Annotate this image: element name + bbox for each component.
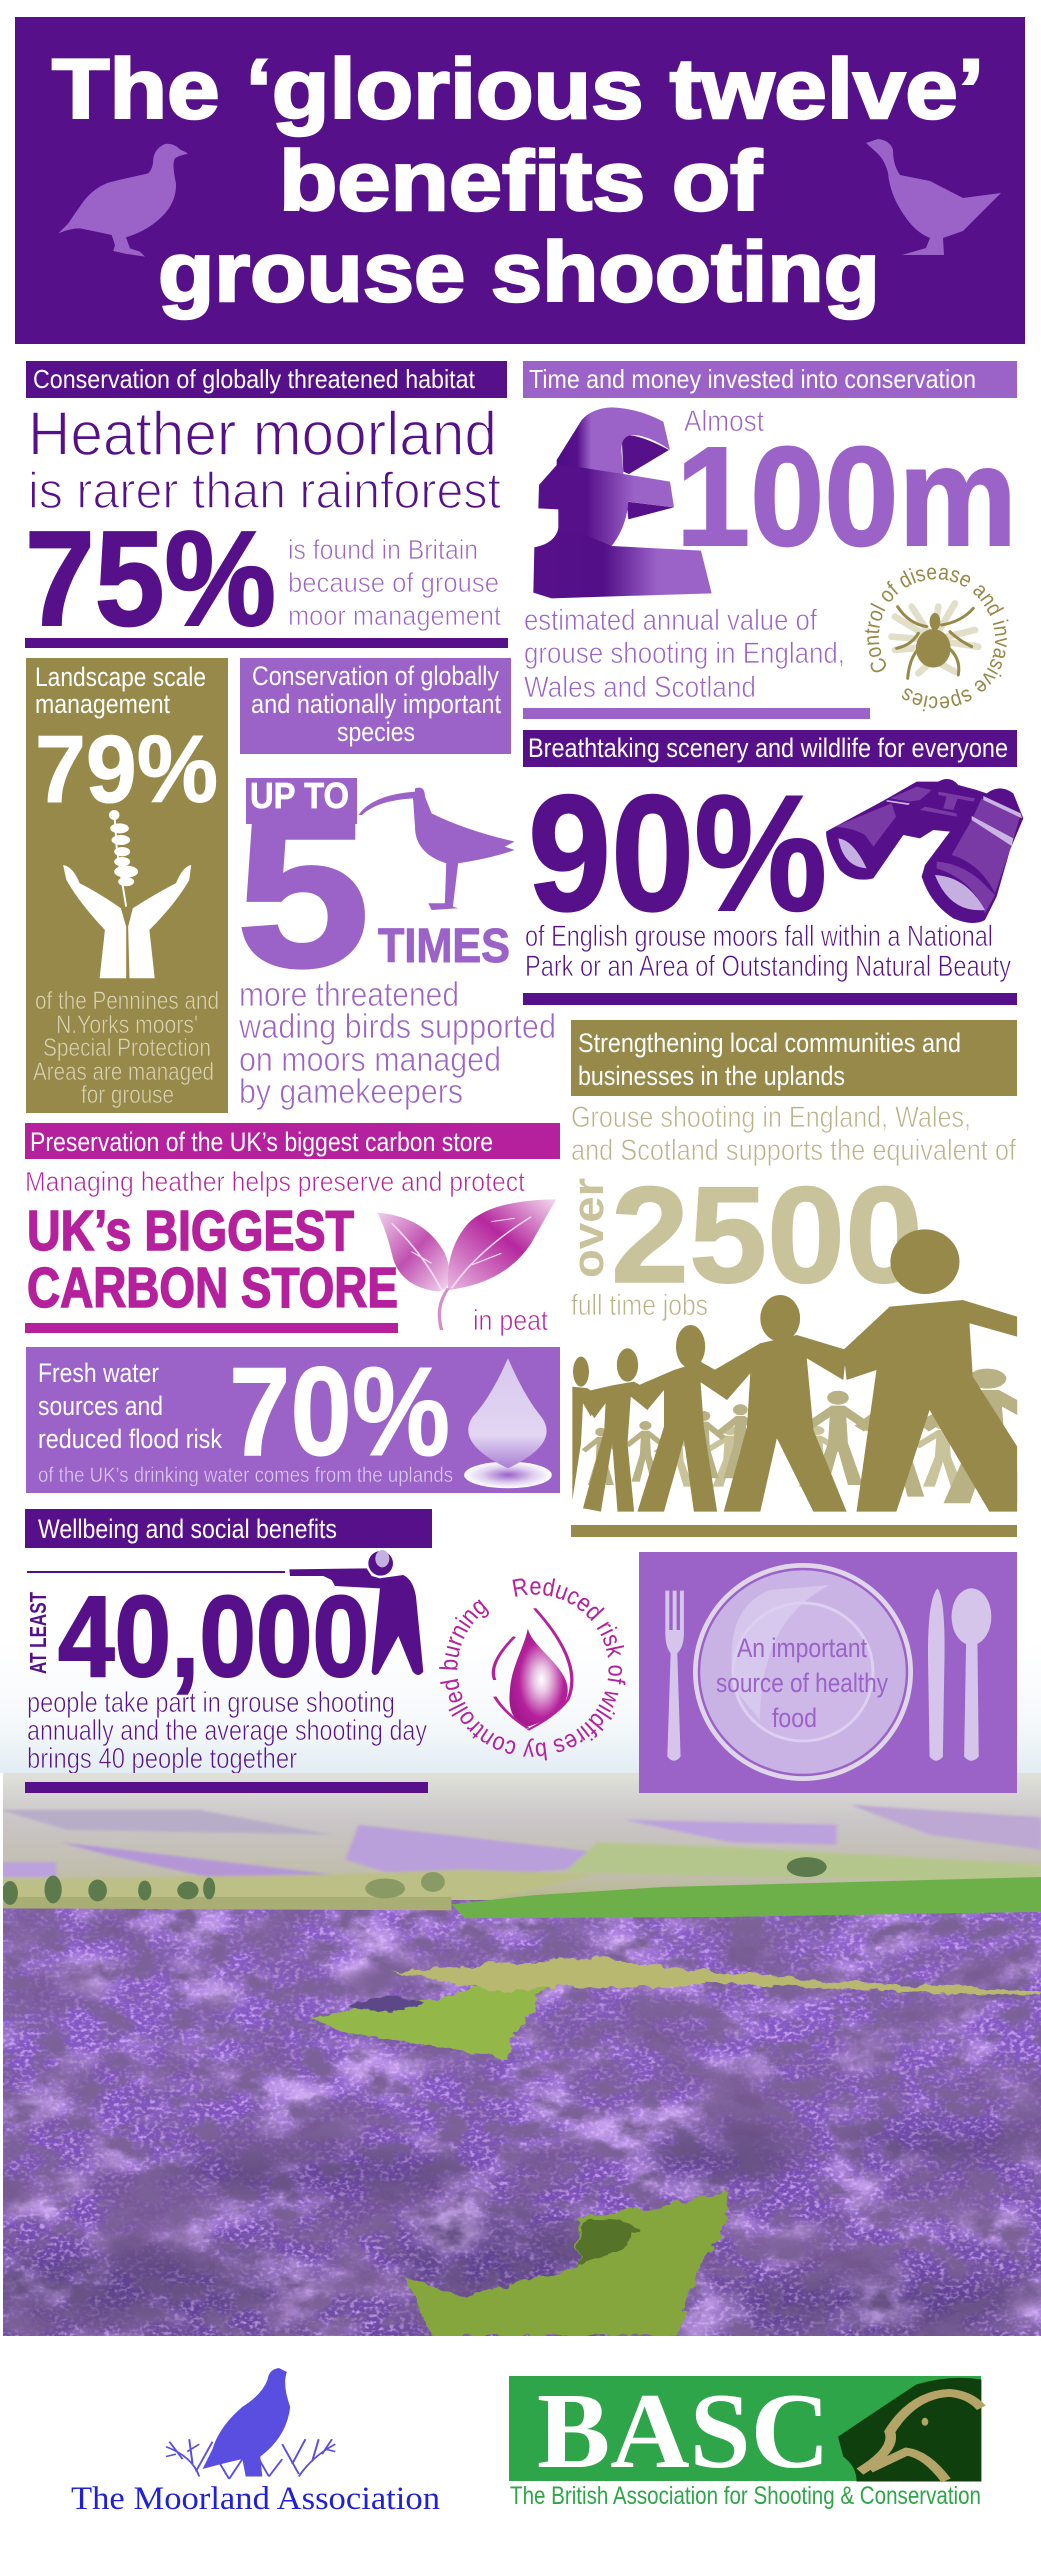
text: pennines: of the Pennines and <box>35 987 219 1015</box>
text: english grouse moors <box>525 920 1011 983</box>
icon: water drop <box>464 1358 552 1488</box>
text: heather moorland: Heather moorland <box>28 400 497 469</box>
stat: 70%: 70% <box>229 1341 450 1482</box>
icon: curlew <box>359 788 515 910</box>
heading: species: species <box>337 717 415 747</box>
icon: cutlery <box>665 1588 991 1761</box>
badge: wildfires: Reduced risk of wildfires by controlled burning <box>439 1578 626 1760</box>
heading: landscape <box>35 662 206 719</box>
text: wading birds: more threatened <box>239 976 459 1014</box>
title banner <box>15 17 1025 344</box>
background sky gradient <box>0 1640 1041 1775</box>
icon: plate <box>693 1563 913 1781</box>
stat: 40,000: 40,000 <box>58 1573 369 1701</box>
text: healthy food: source of healthy <box>716 1668 888 1698</box>
icon: hands and heather <box>63 810 191 978</box>
text: wading birds: on moors managed <box>239 1041 501 1079</box>
label: at least: AT LEAST <box>25 1592 51 1674</box>
icon: pound sign <box>533 407 712 598</box>
photo: heather moorland <box>0 1773 1041 2560</box>
heading: communities: businesses in the uplands <box>578 1061 845 1091</box>
text: estimated annual value: estimated annual value of <box>524 604 818 637</box>
text: estimated annual value <box>524 604 845 704</box>
text: full time jobs: full time jobs <box>571 1289 708 1322</box>
text: people take part: annually and the average shooting day <box>27 1715 427 1747</box>
icon: tick <box>892 603 978 678</box>
panel: habitat <box>25 361 508 654</box>
stat: 79%: 79% <box>35 716 218 823</box>
stat: 2500: 2500 <box>611 1159 923 1312</box>
text: people take part: people take part in grouse shooting <box>27 1687 395 1719</box>
logo: moorland association <box>71 2368 440 2517</box>
icon: grouse and heather <box>166 2368 335 2479</box>
heading: communities: Strengthening local communities and <box>578 1028 961 1058</box>
text: BASC: BASC <box>537 2372 830 2491</box>
text: found in Britain: because of grouse <box>288 567 499 598</box>
heading: fresh water: Fresh water <box>38 1358 159 1388</box>
text: wading birds <box>238 976 556 1111</box>
text: healthy food: An important <box>737 1633 867 1663</box>
heading: species <box>240 658 511 754</box>
text: estimated annual value: grouse shooting in England, <box>524 637 845 670</box>
text: heather moorland <box>28 400 501 519</box>
text: in peat: in peat <box>473 1305 548 1337</box>
panel: scenery <box>523 730 1023 1005</box>
text: found in Britain: moor management <box>288 600 501 631</box>
icon: flame <box>493 1608 572 1730</box>
text: pennines: Areas are managed <box>33 1058 214 1086</box>
icon: leaves <box>377 1199 556 1330</box>
text: found in Britain: is found in Britain <box>288 534 478 565</box>
stat: biggest carbon store: UK’s BIGGEST <box>27 1199 354 1263</box>
text: healthy food <box>716 1633 888 1733</box>
label: over: over <box>564 1178 613 1278</box>
heading: fresh water: sources and <box>38 1391 163 1421</box>
heading: wellbeing <box>25 1509 432 1548</box>
stat: 5: 5 <box>236 770 370 1013</box>
logo: BASC <box>509 2372 981 2510</box>
icon: grouse right <box>866 139 1001 255</box>
label: up to: UP TO <box>250 775 349 816</box>
title text <box>52 42 984 319</box>
icon: binoculars <box>826 779 1023 923</box>
heather field <box>3 1900 1041 2336</box>
panel: wellbeing <box>25 1509 432 1775</box>
text: people take part <box>27 1687 427 1775</box>
icon: grouse left <box>58 144 188 257</box>
panel: healthy food <box>639 1552 1017 1793</box>
stat: 75%: 75% <box>25 503 276 654</box>
stat: biggest carbon store: CARBON STORE <box>27 1256 398 1320</box>
label: times: TIMES <box>378 920 510 973</box>
title text: The ‘glorious twelve’ <box>52 42 984 136</box>
heading: carbon: Preservation of the UK’s biggest carbon store <box>30 1127 493 1157</box>
text: wading birds: wading birds supported <box>238 1008 556 1046</box>
text: healthy food: food <box>772 1703 817 1733</box>
heading: species: Conservation of globally <box>252 661 499 691</box>
stat: 100m: 100m <box>676 417 1017 575</box>
text: managing heather: Managing heather helps preserve and protect <box>25 1166 525 1197</box>
bar: wellbeing footer <box>25 1782 428 1793</box>
panel: investment <box>523 361 1017 719</box>
heading: habitat: Conservation of globally threatened habitat <box>33 364 476 394</box>
panel: landscape scale management <box>26 658 228 1113</box>
text: drinking water: of the UK’s drinking water comes from the uplands <box>38 1464 453 1487</box>
shadows and clearings <box>0 1957 1041 2336</box>
heading: fresh water: reduced flood risk <box>38 1424 222 1454</box>
stat: biggest carbon store <box>27 1199 398 1320</box>
text: people take part: brings 40 people together <box>27 1743 297 1775</box>
badge: control of disease: Control of disease and invasive species <box>864 568 1008 712</box>
icon: people chain <box>572 1229 1041 1512</box>
title text: benefits of <box>279 134 763 228</box>
text: pennines <box>33 987 219 1109</box>
panel: fresh water <box>26 1341 560 1493</box>
icon: duck head <box>838 2378 981 2481</box>
text: heather moorland: is rarer than rainforest <box>28 462 501 519</box>
text: almost: Almost <box>684 405 765 438</box>
text: estimated annual value: Wales and Scotland <box>524 671 756 704</box>
heading: landscape: Landscape scale <box>35 662 206 692</box>
text: grouse shooting supports: Grouse shooting in England, Wales, <box>571 1101 971 1134</box>
panel: carbon store <box>25 1123 560 1337</box>
panel: important species <box>236 658 556 1111</box>
text: found in Britain <box>288 534 501 631</box>
text: grouse shooting supports <box>571 1101 1017 1167</box>
text: wading birds: by gamekeepers <box>239 1073 463 1111</box>
stat: 90%: 90% <box>528 761 827 945</box>
heading: investment: Time and money invested into conservation <box>529 364 976 394</box>
text: pennines: for grouse <box>81 1081 174 1109</box>
heading: species: and nationally important <box>251 689 501 719</box>
text: pennines: Special Protection <box>43 1034 211 1062</box>
text: pennines: N.Yorks moors' <box>56 1011 198 1039</box>
heading: fresh water <box>38 1358 222 1454</box>
text: the moorland association: The Moorland Association <box>71 2481 440 2517</box>
icon: shooter <box>289 1550 423 1675</box>
heading: landscape: management <box>35 689 170 719</box>
heading: communities <box>571 1020 1017 1096</box>
far treeline and bracken <box>0 1857 1041 1918</box>
title text: grouse shooting <box>158 225 880 319</box>
panel: local communities <box>564 1020 1041 1537</box>
heading: wellbeing: Wellbeing and social benefits <box>38 1514 337 1544</box>
